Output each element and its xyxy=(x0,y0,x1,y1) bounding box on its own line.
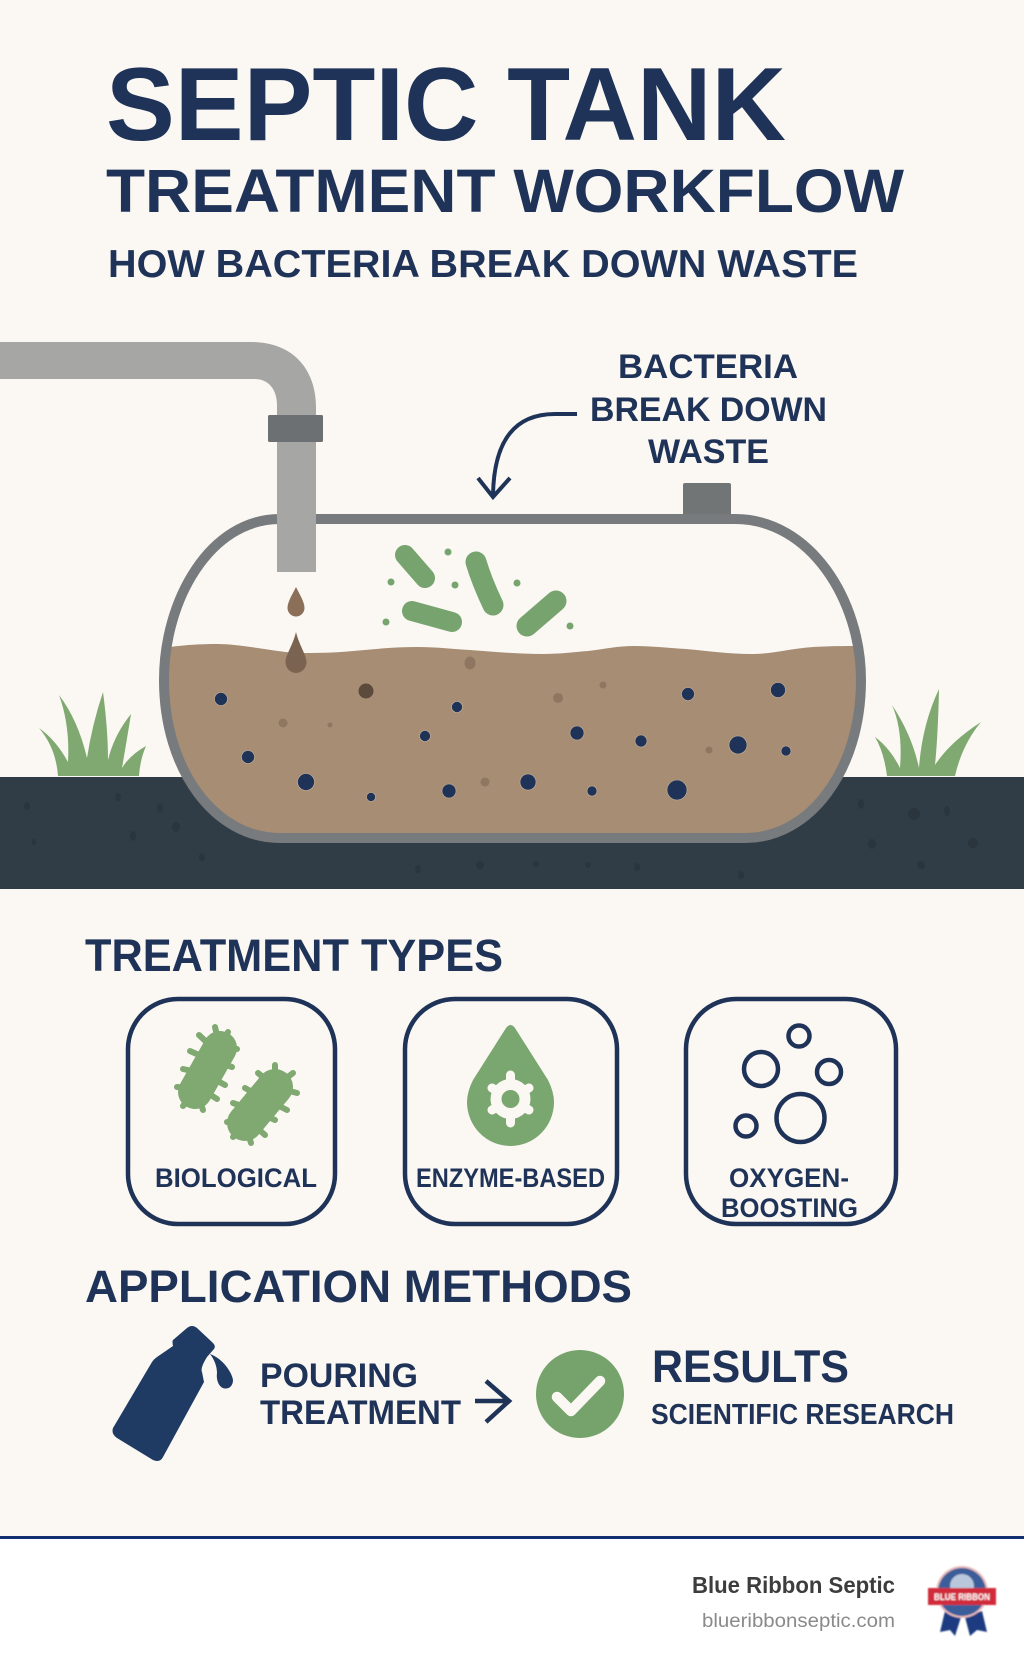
tank: solid particles xyxy=(214,682,791,802)
label: pouring treatment: TREATMENT xyxy=(260,1394,461,1432)
inlet pipe xyxy=(0,342,323,572)
title: Septic Tank: SEPTIC TANK xyxy=(106,47,786,163)
tank: brown particles xyxy=(278,656,712,786)
tank: waste sludge xyxy=(169,644,856,833)
heading: application methods: APPLICATION METHODS xyxy=(85,1261,632,1312)
callout: bacteria break down waste: BACTERIA xyxy=(618,348,798,386)
callout: bacteria break down waste: BREAK DOWN xyxy=(590,391,827,429)
callout arrow xyxy=(478,414,577,497)
results text: SCIENTIFIC RESEARCH xyxy=(651,1399,954,1431)
icon: check circle xyxy=(536,1350,624,1438)
ground soil xyxy=(0,777,1024,889)
label: pouring treatment xyxy=(260,1357,461,1432)
grass: right tuft xyxy=(875,689,981,776)
logo: blue ribbon badge xyxy=(928,1566,996,1636)
footer url: blueribbonseptic.com xyxy=(702,1611,895,1632)
heading: treatment types: TREATMENT TYPES xyxy=(85,930,503,981)
card: enzyme-based xyxy=(405,999,617,1224)
label: oxygen-boosting xyxy=(721,1163,858,1223)
logo: blue ribbon badge: BLUE RIBBON xyxy=(934,1592,990,1602)
callout: bacteria break down waste xyxy=(478,348,827,497)
icon: bottle pouring xyxy=(112,1326,233,1461)
label: oxygen-boosting: BOOSTING xyxy=(721,1193,858,1223)
card: biological xyxy=(128,999,335,1224)
label: oxygen-boosting: OXYGEN- xyxy=(729,1163,849,1193)
tagline: How bacteria break down waste: HOW BACTERIA BREAK DOWN WASTE xyxy=(108,243,858,286)
callout: bacteria break down waste: WASTE xyxy=(648,433,769,471)
waste drops xyxy=(286,587,306,673)
icon: oxygen bubbles xyxy=(736,1026,841,1142)
bacteria rods xyxy=(382,548,574,630)
subtitle: Treatment Workflow: TREATMENT WORKFLOW xyxy=(106,157,904,225)
tank: access riser xyxy=(683,483,731,517)
arrow to results xyxy=(475,1381,509,1422)
footer xyxy=(0,1536,1024,1666)
tank xyxy=(160,483,870,850)
card: oxygen-boosting xyxy=(686,999,896,1224)
footer brand name: Blue Ribbon Septic xyxy=(692,1572,895,1598)
label: biological: BIOLOGICAL xyxy=(155,1163,317,1193)
icon: bacteria xyxy=(177,1027,297,1143)
label: pouring treatment: POURING xyxy=(260,1357,418,1395)
grass: left tuft xyxy=(39,692,146,776)
pipe collar xyxy=(268,415,323,442)
tank: shell outline xyxy=(164,519,861,838)
label: enzyme-based: ENZYME-BASED xyxy=(416,1163,605,1193)
results text xyxy=(651,1341,954,1431)
results text: RESULTS xyxy=(652,1341,849,1392)
icon: enzyme drop with gear xyxy=(467,1025,554,1146)
